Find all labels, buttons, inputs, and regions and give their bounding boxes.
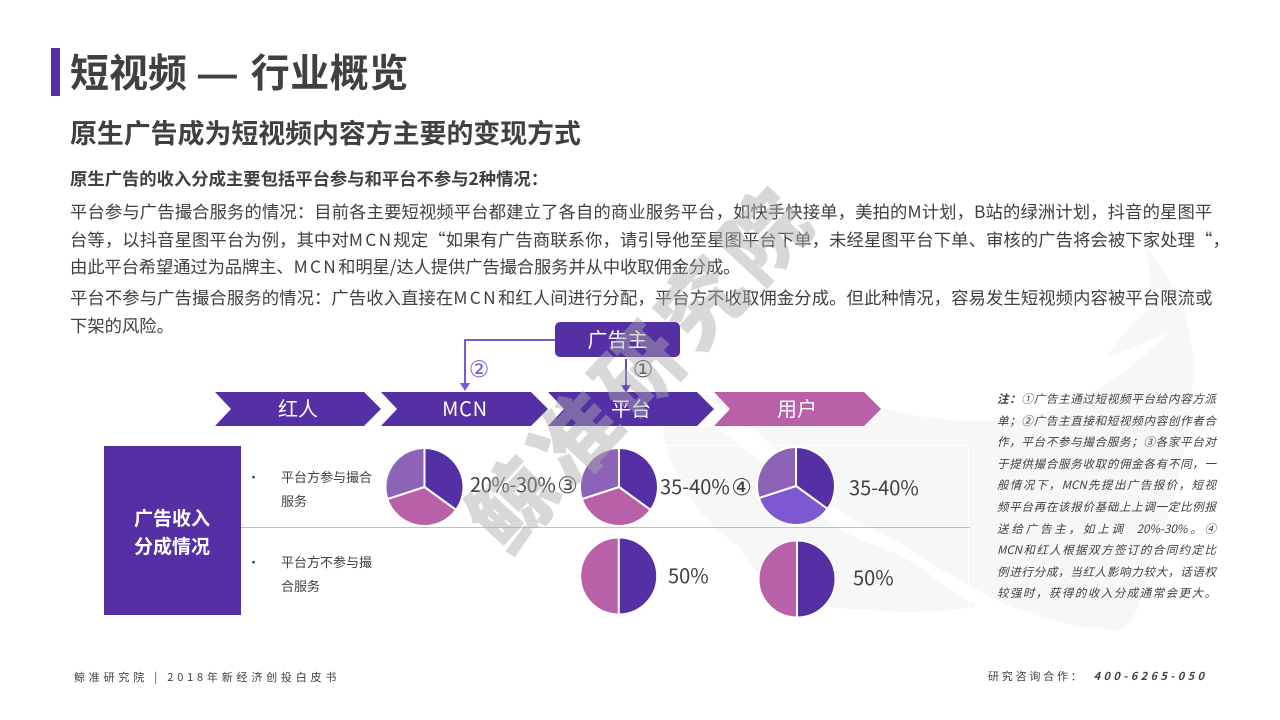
marker 2: ② xyxy=(469,357,489,383)
revenue table panel xyxy=(104,446,970,615)
arrow: advertiser to MCN xyxy=(460,340,555,391)
row 2 label: 合服务 xyxy=(281,576,320,595)
value labels: 50% xyxy=(853,562,894,591)
body text block: 平台参与广告撮合服务的情况：目前各主要短视频平台都建立了各自的商业服务平台，如快手快接单，美拍的M计划，B站的绿洲计划，抖音的星图平 xyxy=(70,198,1212,223)
chevron: 平台 xyxy=(548,392,714,426)
value labels xyxy=(470,469,919,591)
row 1 label xyxy=(247,467,372,510)
value labels: 35-40% xyxy=(660,471,730,500)
body text block xyxy=(70,198,1230,337)
notes text: 频平台再在该报价基础上上调一定比例报 xyxy=(997,499,1216,515)
row 2 label: • xyxy=(247,552,260,571)
value labels: 35-40% xyxy=(849,472,919,501)
advertiser box: 广告主 xyxy=(588,324,648,353)
table frame xyxy=(241,445,969,615)
pie: 50 percent right xyxy=(758,540,836,618)
chevron: 红人: 红人 xyxy=(278,393,318,422)
title: 短视频 — 行业概览 xyxy=(70,43,409,99)
body text block: 由此平台希望通过为品牌主、MCN和明星/达人提供广告撮合服务并从中收取佣金分成。 xyxy=(70,253,740,278)
body text block: 平台不参与广告撮合服务的情况：广告收入直接在MCN和红人间进行分配，平台方不收取佣金分成。但此种情况，容易发生短视频内容被平台限流或 xyxy=(70,284,1213,309)
pie: creators with platform xyxy=(757,447,835,525)
notes text: 送给广告主，如上调 20%-30%。④ xyxy=(997,521,1216,537)
notes text xyxy=(997,391,1218,601)
chevron: MCN: MCN xyxy=(442,393,488,422)
row heading box: 广告收入 xyxy=(134,504,210,531)
value labels: 20%-30% xyxy=(470,469,555,498)
watermark: 鲸准研究院 xyxy=(437,155,839,574)
intro heading: 原生广告的收入分成主要包括平台参与和平台不参与2种情况： xyxy=(70,165,548,190)
pie: platform with platform xyxy=(580,448,658,526)
chevron: 用户: 用户 xyxy=(777,393,817,422)
row heading box: 分成情况 xyxy=(134,532,210,559)
footer right: 研究咨询合作： 400-6265-050 xyxy=(988,668,1207,684)
subtitle: 原生广告成为短视频内容方主要的变现方式 xyxy=(70,112,581,151)
body text block: 下架的风险。 xyxy=(70,312,174,337)
marker 1: ① xyxy=(633,357,653,383)
pie: 50 percent left xyxy=(580,538,657,614)
notes text: MCN和红人根据双方签订的合同约定比 xyxy=(997,542,1216,558)
notes text: 单；②广告主直接和短视频内容创作者合 xyxy=(997,413,1216,429)
chevron: 红人 xyxy=(215,392,381,426)
arrow: advertiser to platform xyxy=(621,359,631,393)
body text block: 台等，以抖音星图平台为例，其中对MCN规定“如果有广告商联系你，请引导他至星图平台下单，未经星图平台下单、审核的广告将会被下家处理“， xyxy=(70,226,1230,251)
row divider xyxy=(241,527,970,528)
row 1 label: 服务 xyxy=(281,491,307,510)
notes text: 于提供撮合服务收取的佣金各有不同，一 xyxy=(997,456,1216,472)
notes text: 较强时，获得的收入分成通常会更大。 xyxy=(997,585,1216,601)
notes text: 例进行分成，当红人影响力较大，话语权 xyxy=(997,564,1216,580)
row 1 label: 平台方参与撮合 xyxy=(281,467,372,486)
chevron: 用户 xyxy=(714,392,881,426)
value labels: ③ xyxy=(557,473,578,499)
chevron: MCN xyxy=(381,392,548,426)
chevron: 平台: 平台 xyxy=(611,393,651,422)
notes text: 注：①广告主通过短视频平台给内容方派 xyxy=(997,391,1216,407)
notes text: 般情况下，MCN先提出广告报价，短视 xyxy=(997,477,1216,493)
advertiser box xyxy=(555,322,680,357)
value labels: 50% xyxy=(668,560,709,589)
row 2 label: 平台方不参与撮 xyxy=(281,552,372,571)
row 1 label: • xyxy=(247,467,260,486)
row heading box xyxy=(104,446,241,615)
notes text: 作，平台不参与撮合服务；③各家平台对 xyxy=(997,434,1216,450)
title accent bar xyxy=(51,48,60,96)
value labels: ④ xyxy=(731,475,752,501)
row 2 label xyxy=(247,552,372,595)
footer left: 鲸准研究院 | 2018年新经济创投白皮书 xyxy=(74,669,340,685)
pie: MCN with platform xyxy=(385,448,464,526)
